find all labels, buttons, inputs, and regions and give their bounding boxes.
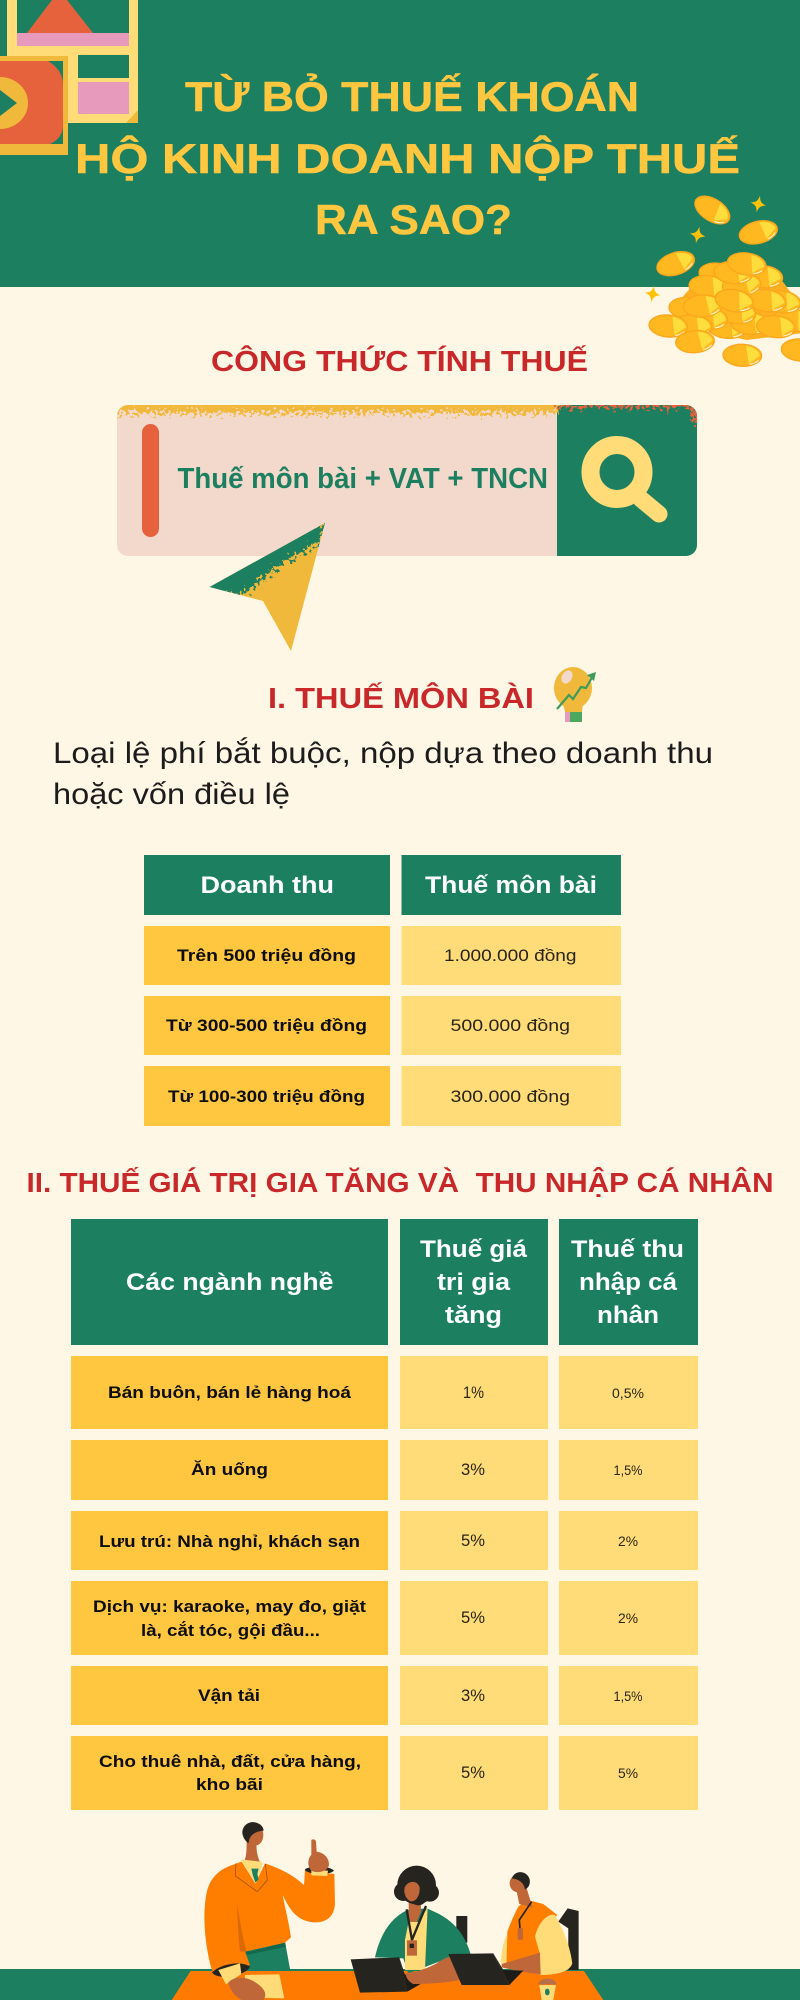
row: accommodation [71, 1511, 698, 1570]
figure: standing man [204, 1822, 335, 1975]
heading: section two: II. THUẾ GIÁ TRỊ GIA TĂNG VÀ THU NHẬP CÁ NHÂN [26, 1167, 774, 1198]
row: services [71, 1581, 698, 1655]
title: TỪ BỎ THUẾ KHOÁN [185, 72, 639, 120]
panel: header band [0, 0, 800, 287]
title: RA SAO? [315, 196, 512, 243]
coffee cup [538, 1979, 557, 2000]
table header: trị gia [437, 1269, 511, 1296]
row: transport: 1,5% [614, 1688, 642, 1704]
table header [144, 855, 621, 915]
row: 300 to 500 million: 500.000 đồng [450, 1017, 570, 1035]
table header: Thuế thu [571, 1236, 684, 1263]
row: rentals: 5% [618, 1765, 638, 1781]
row: wholesale and retail: Bán buôn, bán lẻ hàng hoá [108, 1384, 352, 1402]
row: food and drink: Ăn uống [191, 1460, 268, 1479]
text block: intro: Loại lệ phí bắt buộc, nộp dựa theo doanh thu [53, 737, 713, 770]
row: wholesale and retail [71, 1356, 698, 1429]
row: services: Dịch vụ: karaoke, may đo, giặt [93, 1598, 367, 1616]
row: food and drink: 1,5% [614, 1462, 642, 1478]
row: accommodation: 5% [461, 1532, 485, 1550]
laptop: centre [351, 1957, 421, 1993]
table header: tăng [445, 1302, 502, 1329]
footer green band [0, 1969, 800, 2000]
row: 100 to 300 million: Từ 100-300 triệu đồng [168, 1088, 365, 1106]
table header [71, 1219, 698, 1345]
arm: woman typing [406, 1956, 459, 1984]
row: services: 2% [618, 1610, 638, 1626]
figure: woman with afro [375, 1866, 472, 1973]
row: transport: Vận tải [198, 1687, 260, 1705]
panel: search bar formula [117, 405, 697, 556]
row: wholesale and retail: 1% [463, 1384, 484, 1402]
row: accommodation: 2% [618, 1533, 638, 1549]
row: rentals: 5% [461, 1764, 485, 1782]
heading: formula: CÔNG THỨC TÍNH THUẾ [211, 344, 588, 378]
table: business license tax [144, 855, 621, 1126]
illustration: office meeting [0, 1822, 800, 2000]
row: above 500 million [144, 926, 621, 985]
row: 300 to 500 million [144, 996, 621, 1055]
table: VAT and personal income tax [71, 1219, 698, 1810]
row: food and drink: 3% [461, 1461, 485, 1479]
chairs [456, 1908, 579, 1970]
table header: Thuế giá [420, 1236, 528, 1263]
title [75, 72, 740, 243]
row: transport [71, 1666, 698, 1725]
table header: Doanh thu [200, 872, 334, 899]
row: 100 to 300 million: 300.000 đồng [450, 1088, 570, 1106]
row: transport: 3% [461, 1687, 485, 1705]
row: services: là, cắt tóc, gội đầu... [141, 1621, 320, 1640]
row: rentals: Cho thuê nhà, đất, cửa hàng, [99, 1753, 361, 1771]
row: above 500 million: 1.000.000 đồng [444, 947, 576, 965]
title: HỘ KINH DOANH NỘP THUẾ [75, 134, 740, 182]
table header: nhân [597, 1302, 659, 1329]
text block: intro [53, 737, 713, 811]
row: 300 to 500 million: Từ 300-500 triệu đồng [166, 1017, 367, 1035]
paper and hand [212, 1963, 284, 2000]
text block: intro: hoặc vốn điều lệ [53, 778, 290, 811]
table header: Thuế môn bài [425, 872, 597, 899]
laptop: right [448, 1953, 523, 1985]
table header: nhập cá [579, 1269, 678, 1296]
icon: magnifier [590, 445, 659, 514]
table header: Các ngành nghề [126, 1269, 334, 1296]
icon: video and layout collage [0, 0, 138, 155]
icon: orange text cursor [142, 424, 159, 537]
icon: light bulb with growth arrow [554, 667, 596, 722]
table [172, 1971, 603, 2000]
row: accommodation: Lưu trú: Nhà nghỉ, khách sạn [99, 1533, 360, 1551]
heading: section one: I. THUẾ MÔN BÀI [268, 681, 534, 715]
row: services: 5% [461, 1609, 485, 1627]
row: above 500 million: Trên 500 triệu đồng [177, 947, 356, 965]
figure: seated colleague [501, 1872, 572, 1975]
row: 100 to 300 million [144, 1066, 621, 1126]
row: wholesale and retail: 0,5% [612, 1385, 644, 1401]
formula text: Thuế môn bài + VAT + TNCN [178, 463, 548, 495]
icon: gold coins pile [643, 190, 800, 367]
row: rentals [71, 1736, 698, 1810]
row: rentals: kho bãi [196, 1776, 263, 1794]
row: food and drink [71, 1440, 698, 1500]
icon: arrow pointer [210, 523, 325, 651]
